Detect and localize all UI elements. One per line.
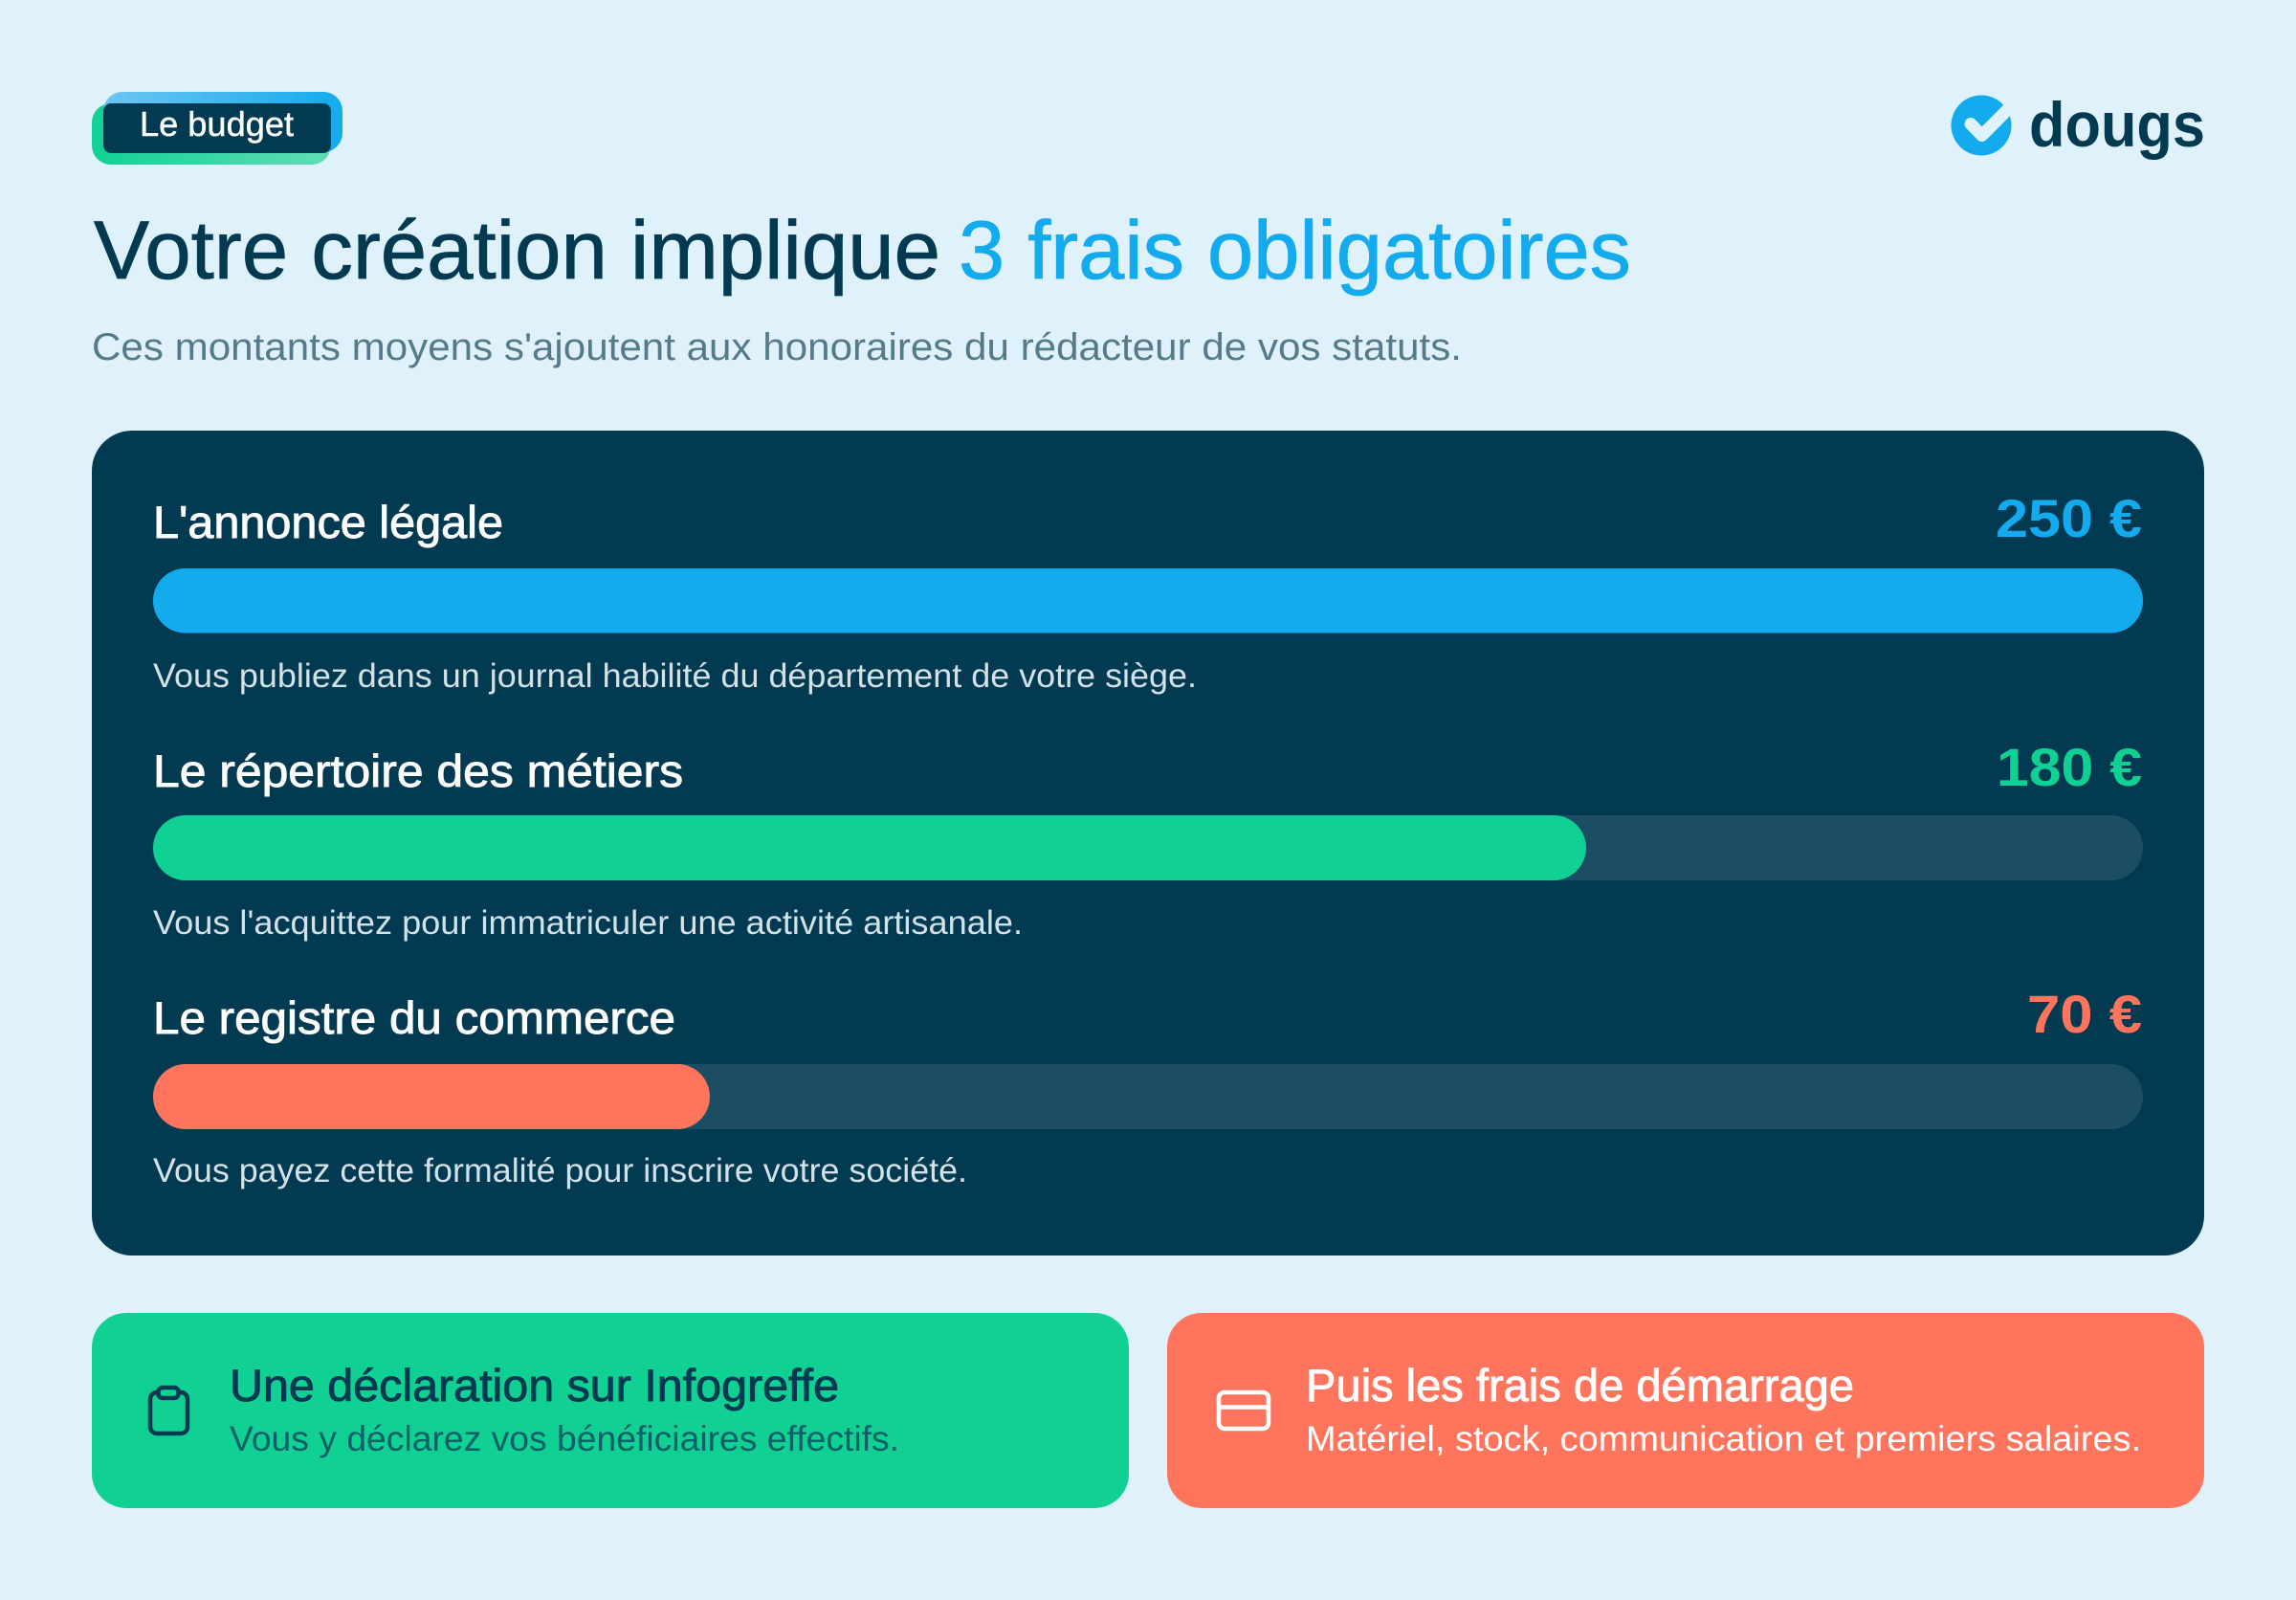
logo: dougs	[1952, 89, 2205, 160]
row: répertoire des métiers	[153, 737, 2143, 942]
panel: frais obligatoires	[92, 431, 2204, 1256]
row: répertoire des métiers: 180 €	[1997, 737, 2142, 797]
row: registre du commerce: 70 €	[2027, 984, 2142, 1044]
title: Votre création implique	[94, 205, 940, 297]
logo: dougs: dougs	[2029, 89, 2205, 160]
row: registre du commerce	[153, 984, 2143, 1189]
badge: Le budget	[92, 92, 342, 165]
row: annonce légale	[153, 488, 2143, 695]
row: registre du commerce: Vous payez cette formalité pour inscrire votre société.	[153, 1152, 967, 1189]
icon: clipboard	[150, 1388, 188, 1433]
panel: Infogreffe: Vous y déclarez vos bénéficiaires effectifs.	[230, 1419, 899, 1458]
row: annonce légale: Vous publiez dans un journal habilité du département de votre siège.	[153, 657, 1197, 695]
panel: frais de démarrage	[1167, 1313, 2204, 1508]
row: annonce légale: 250 €	[1996, 488, 2142, 548]
row: annonce légale: L'annonce légale	[153, 497, 503, 547]
badge: Le budget: Le budget	[140, 104, 294, 144]
row: registre du commerce: Le registre du commerce	[153, 992, 675, 1043]
panel: frais de démarrage: Puis les frais de démarrage	[1306, 1360, 1854, 1411]
panel: Infogreffe: Une déclaration sur Infogreffe	[230, 1360, 839, 1411]
subtitle: Ces montants moyens s'ajoutent aux honoraires du rédacteur de vos statuts.	[92, 326, 1462, 368]
panel: frais de démarrage: Matériel, stock, communication et premiers salaires.	[1306, 1419, 2141, 1458]
row: répertoire des métiers: Le répertoire des métiers	[153, 745, 683, 796]
title highlight: 3 frais obligatoires	[959, 205, 1631, 297]
panel: Infogreffe	[92, 1313, 1129, 1508]
row: répertoire des métiers: Vous l'acquittez pour immatriculer une activité artisanale.	[153, 904, 1023, 942]
icon: bank card	[1219, 1392, 1269, 1429]
